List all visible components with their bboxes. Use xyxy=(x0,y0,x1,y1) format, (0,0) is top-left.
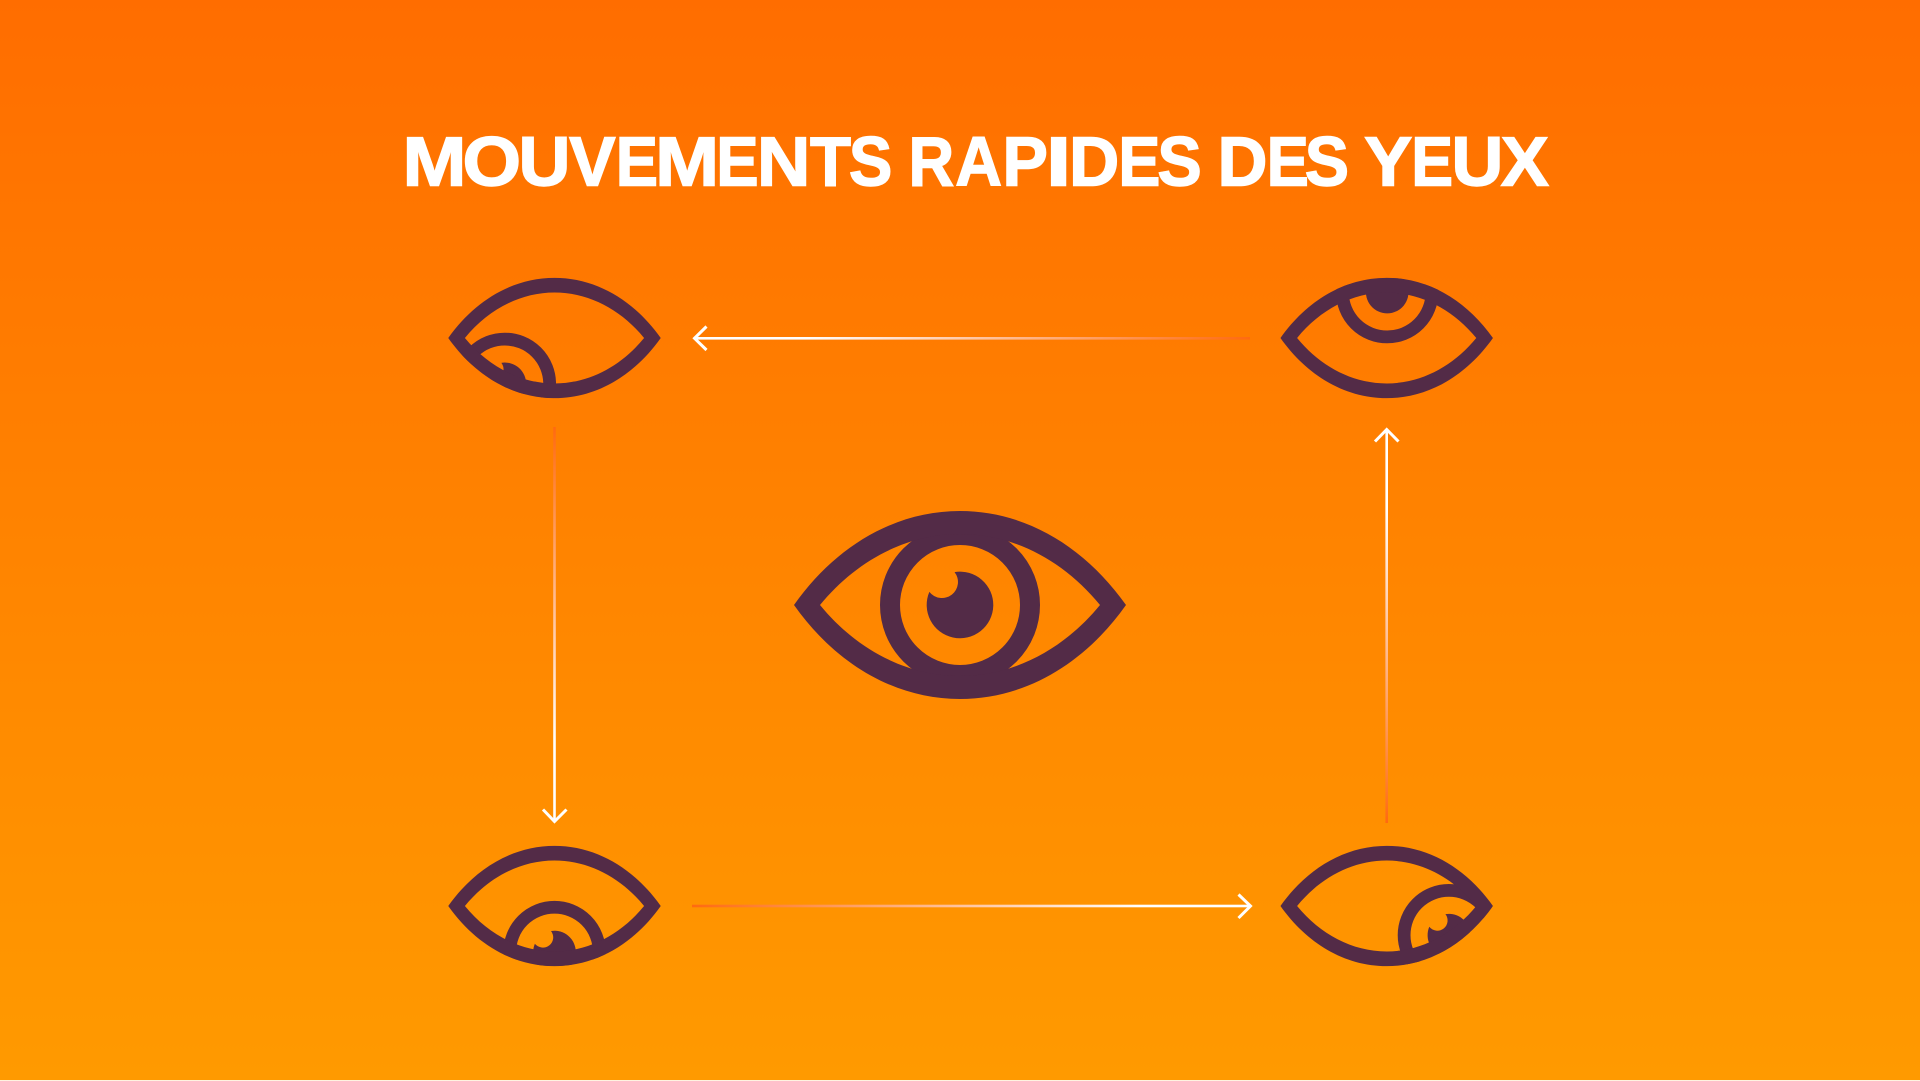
arrow: top left to bottom left xyxy=(543,427,566,822)
arrow: bottom left to bottom right xyxy=(692,894,1250,918)
title: E xyxy=(616,122,658,200)
icon: eye looking down (bottom left) xyxy=(448,846,661,966)
title: S xyxy=(1305,122,1349,200)
icon: eye looking up (top right) xyxy=(1280,278,1493,398)
title: S xyxy=(849,122,892,200)
icon: eye looking down-right (bottom right) xyxy=(1280,846,1493,966)
title: U xyxy=(1451,122,1503,200)
title: Y xyxy=(1364,122,1412,200)
icon: central eye looking straight ahead xyxy=(794,511,1126,699)
title: R xyxy=(908,122,954,200)
arrow: bottom right to top right xyxy=(1375,429,1398,823)
title: M xyxy=(402,122,466,200)
title: T xyxy=(810,122,851,200)
title: E xyxy=(1411,122,1453,200)
title: D xyxy=(1218,122,1268,200)
title: A xyxy=(955,122,1002,200)
title: M xyxy=(655,122,719,200)
title: S xyxy=(1157,122,1202,200)
arrow: top right to top left xyxy=(694,326,1250,350)
title: P xyxy=(1002,122,1048,200)
title: X xyxy=(1501,122,1549,200)
title: O xyxy=(462,122,521,200)
title: N xyxy=(757,122,810,200)
icon: eye looking down-left (top left) xyxy=(448,278,661,398)
title: I xyxy=(1046,122,1072,200)
title: E xyxy=(1118,122,1160,200)
title: U xyxy=(518,122,570,200)
title: E xyxy=(1267,122,1309,200)
title: D xyxy=(1069,122,1119,200)
title: V xyxy=(569,122,616,200)
title: E xyxy=(716,122,759,200)
